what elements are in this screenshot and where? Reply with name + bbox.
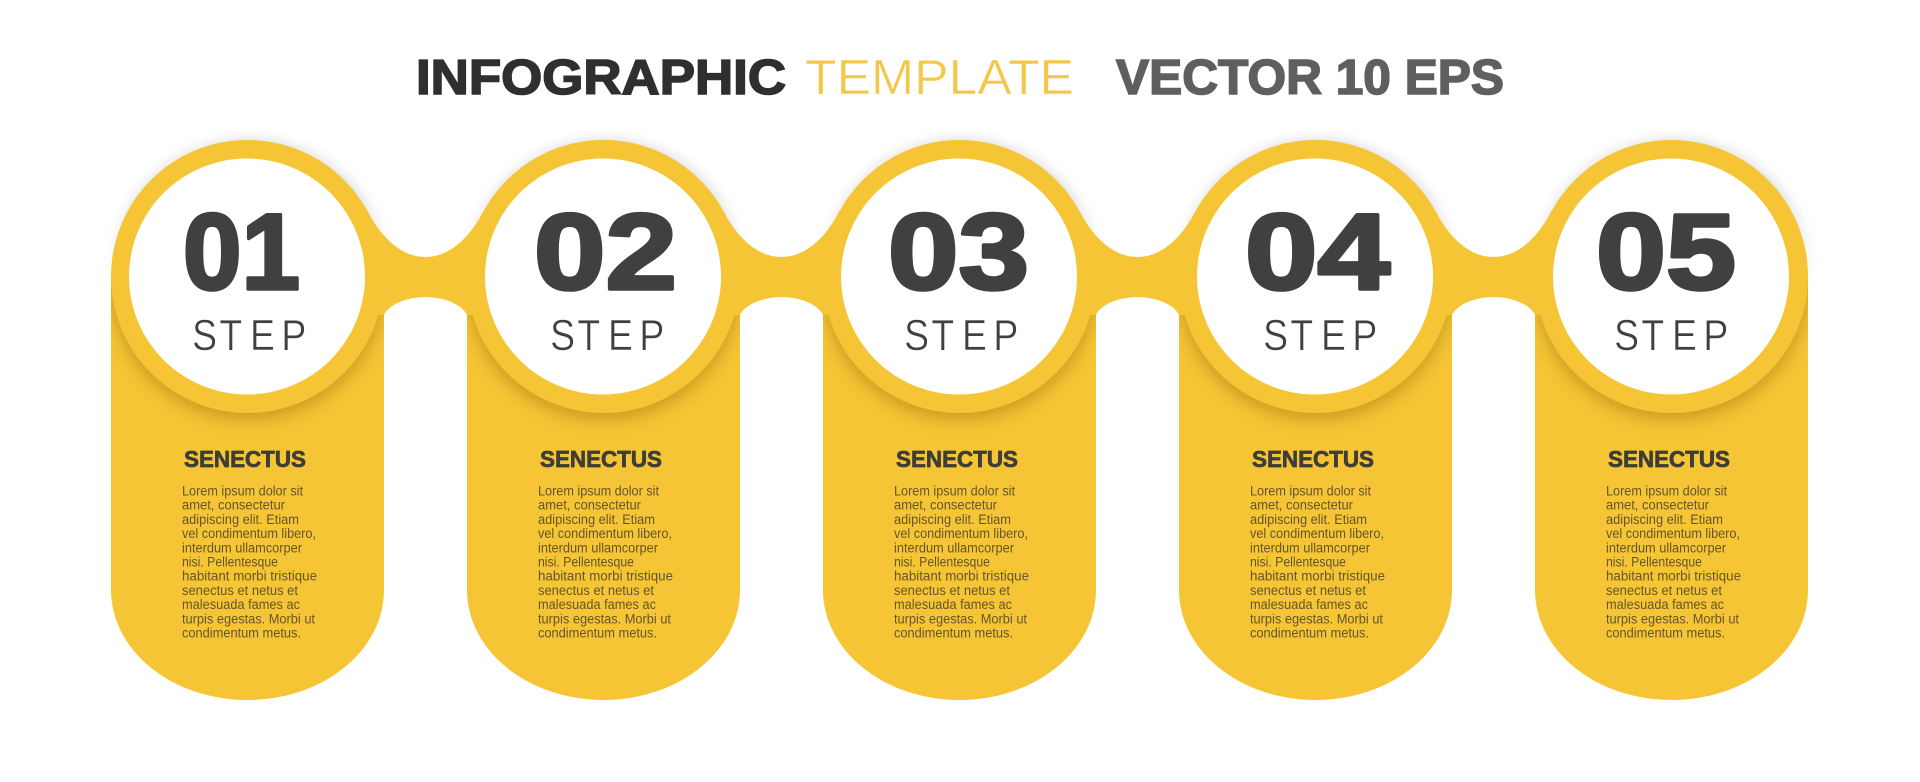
body text 3: amet, consectetur [894,498,998,513]
body text 1: vel condimentum libero, [182,526,316,541]
ring 3 [823,140,1096,413]
body text 1: condimentum metus. [182,626,301,640]
white circle 4 [1197,158,1433,394]
body text 4: amet, consectetur [1250,498,1354,513]
title: VECTOR 10 EPS: VECTOR 10 EPS [1116,51,1504,105]
number 02: 02 [534,191,677,312]
body text 5: senectus et netus et [1606,583,1722,598]
label STEP 5: STEP [1614,310,1728,360]
label STEP 1: STEP [192,310,306,360]
body text 3: adipiscing elit. Etiam [894,512,1011,527]
step 5 [1535,140,1808,640]
step 2 [467,140,740,640]
step 3 [823,140,1096,640]
body text 2: senectus et netus et [538,583,654,598]
title [416,51,1504,105]
body text 1: Lorem ipsum dolor sit [182,484,303,498]
white circle 5 [1553,158,1789,394]
body text 3: Lorem ipsum dolor sit [894,484,1015,498]
heading 3: SENECTUS [896,446,1018,472]
title: TEMPLATE: TEMPLATE [805,51,1074,105]
body text 2: vel condimentum libero, [538,526,672,541]
body text 2: condimentum metus. [538,626,657,640]
body text 3: malesuada fames ac [894,597,1012,612]
body text 3: condimentum metus. [894,626,1013,640]
label STEP 3: STEP [904,310,1018,360]
body text 4: interdum ullamcorper [1250,540,1371,555]
ring 1 [111,140,384,413]
step 4 [1179,140,1452,640]
number 05: 05 [1596,191,1736,312]
number 04: 04 [1245,191,1390,312]
body text 5: adipiscing elit. Etiam [1606,512,1723,527]
ring shadows on white background [116,135,1807,254]
body text 1: amet, consectetur [182,498,286,513]
body text 4: habitant morbi tristique [1250,569,1385,584]
body text 5: condimentum metus. [1606,626,1725,640]
body text 4: senectus et netus et [1250,583,1366,598]
body text 2: nisi. Pellentesque [538,554,634,570]
heading 5: SENECTUS [1608,446,1730,472]
body text 3 [894,484,1029,640]
body text 1: habitant morbi tristique [182,569,317,584]
body text 5 [1606,484,1741,640]
heading 1: SENECTUS [184,446,306,472]
body text 1: nisi. Pellentesque [182,554,278,570]
white circle 1 [129,158,365,394]
body text 4: malesuada fames ac [1250,597,1368,612]
body text 1: turpis egestas. Morbi ut [182,611,315,626]
ring 4 [1179,140,1452,413]
step 1 [111,140,384,640]
body text 5: nisi. Pellentesque [1606,554,1702,570]
body text 5: turpis egestas. Morbi ut [1606,611,1739,626]
body text 2: Lorem ipsum dolor sit [538,484,659,498]
body text 4: vel condimentum libero, [1250,526,1384,541]
heading 4: SENECTUS [1252,446,1374,472]
body text 1: malesuada fames ac [182,597,300,612]
body text 2: habitant morbi tristique [538,569,673,584]
body text 5: interdum ullamcorper [1606,540,1727,555]
body text 2: malesuada fames ac [538,597,656,612]
body text 5: amet, consectetur [1606,498,1710,513]
ring shadows on panels [111,284,1808,426]
body text 3: interdum ullamcorper [894,540,1015,555]
number 01: 01 [183,191,300,312]
body text 5: habitant morbi tristique [1606,569,1741,584]
body text 2 [538,484,673,640]
body text 1: senectus et netus et [182,583,298,598]
body text 1: interdum ullamcorper [182,540,303,555]
body text 2: turpis egestas. Morbi ut [538,611,671,626]
ring 2 [467,140,740,413]
heading 2: SENECTUS [540,446,662,472]
body text 1 [182,484,317,640]
body text 3: habitant morbi tristique [894,569,1029,584]
body text 4: turpis egestas. Morbi ut [1250,611,1383,626]
yellow panels [111,276,1808,700]
label STEP 2: STEP [550,310,664,360]
body text 4: adipiscing elit. Etiam [1250,512,1367,527]
body text 5: vel condimentum libero, [1606,526,1740,541]
white circle 2 [485,158,721,394]
body text 5: Lorem ipsum dolor sit [1606,484,1727,498]
label STEP 4: STEP [1263,310,1377,360]
body text 3: vel condimentum libero, [894,526,1028,541]
white circle 3 [841,158,1077,394]
body text 4: Lorem ipsum dolor sit [1250,484,1371,498]
connectors between steps [350,210,1568,315]
body text 5: malesuada fames ac [1606,597,1724,612]
body text 2: interdum ullamcorper [538,540,659,555]
ring 5 [1535,140,1808,413]
number 03: 03 [888,191,1029,312]
body text 3: turpis egestas. Morbi ut [894,611,1027,626]
body text 2: adipiscing elit. Etiam [538,512,655,527]
body text 1: adipiscing elit. Etiam [182,512,299,527]
body text 4 [1250,484,1385,640]
body text 3: senectus et netus et [894,583,1010,598]
body text 4: condimentum metus. [1250,626,1369,640]
title: INFOGRAPHIC: INFOGRAPHIC [416,51,786,105]
body text 4: nisi. Pellentesque [1250,554,1346,570]
body text 3: nisi. Pellentesque [894,554,990,570]
body text 2: amet, consectetur [538,498,642,513]
